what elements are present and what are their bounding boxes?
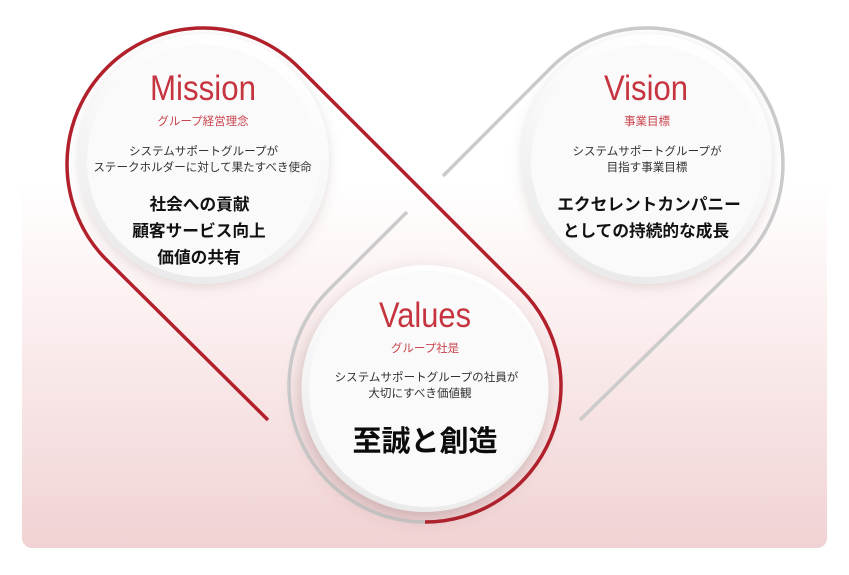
heading: Values: Values — [379, 296, 471, 335]
key points: Vision: エクセレントカンパニー — [557, 195, 741, 214]
heading: Mission: Mission — [150, 69, 256, 108]
connector: red path around Mission and Values — [67, 28, 561, 522]
subtitle: Values: グループ社是 — [391, 341, 460, 355]
panel: Values — [302, 265, 548, 512]
subtitle: Mission: グループ経営理念 — [157, 114, 249, 128]
description: Values: 大切にすべき価値観 — [368, 386, 472, 400]
description: Mission: システムサポートグループが — [129, 144, 278, 158]
key points: Vision: としての持続的な成長 — [563, 220, 729, 240]
description: Vision: 目指す事業目標 — [607, 160, 688, 174]
panel: Vision — [522, 34, 772, 284]
key point: Values: 至誠と創造 — [352, 425, 498, 458]
panel: Mission — [79, 34, 329, 284]
disc: Values — [302, 265, 548, 512]
key points: Mission: 価値の共有 — [157, 248, 241, 267]
disc: Vision — [522, 34, 772, 284]
subtitle: Vision: 事業目標 — [624, 114, 670, 128]
description: Vision: システムサポートグループが — [572, 144, 722, 158]
disc: Mission — [79, 34, 329, 284]
description: Values: システムサポートグループの社員が — [335, 370, 519, 384]
key points: Mission: 社会への貢献 — [149, 194, 250, 214]
description: Mission: ステークホルダーに対して果たすべき使命 — [93, 160, 312, 174]
connector: gray path through Values circle — [289, 212, 425, 522]
connector: gray path around Vision circle — [443, 28, 783, 420]
key points: Mission: 顧客サービス向上 — [132, 220, 266, 240]
heading: Vision: Vision — [604, 69, 688, 108]
